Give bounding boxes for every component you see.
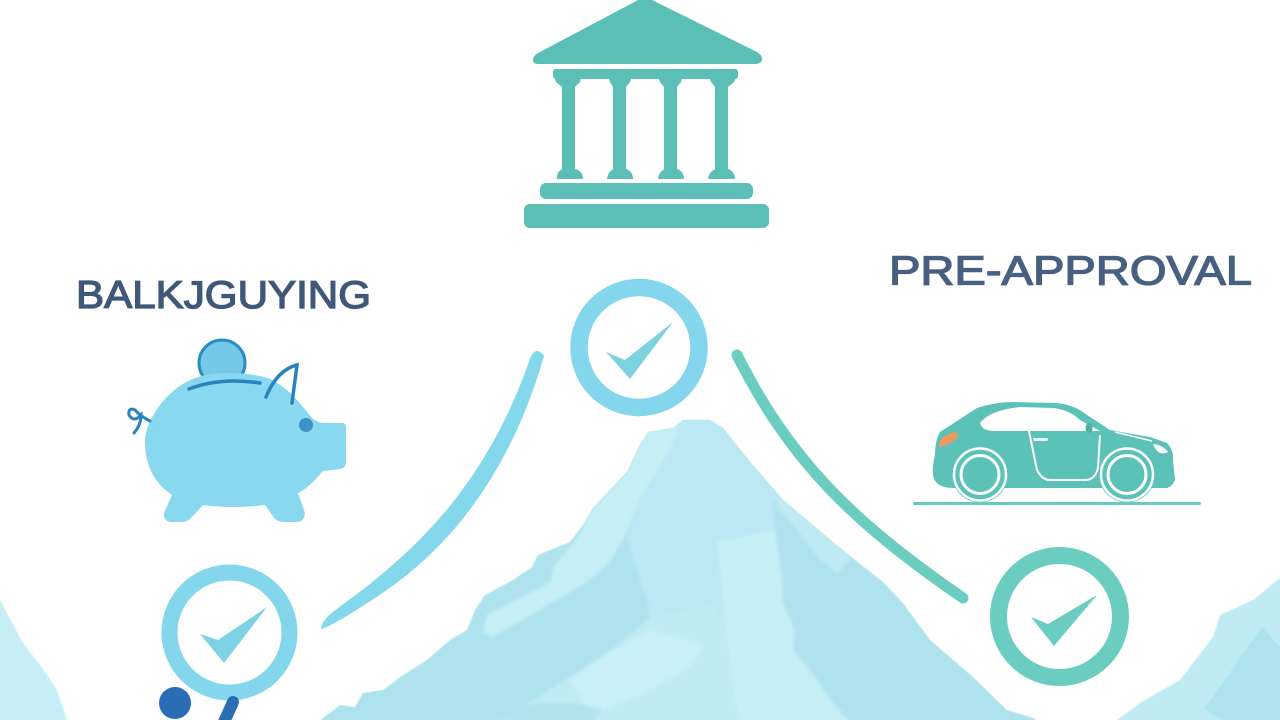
- bank building icon: [524, 0, 769, 228]
- check ring: left: [170, 572, 290, 692]
- rear wheel: [952, 446, 1008, 502]
- check ring: right: [998, 556, 1120, 678]
- car mirror: [1086, 423, 1092, 433]
- pig tail: [129, 409, 150, 433]
- pig slot: [189, 381, 260, 389]
- icon: bank upper step: [540, 183, 753, 199]
- right connecting arc: [737, 355, 963, 598]
- blue dot figure: [159, 687, 233, 720]
- mountain shaded layers: [483, 415, 853, 720]
- road line: [913, 502, 1201, 505]
- pig eye: [299, 418, 313, 432]
- right background mountain: [1113, 576, 1280, 720]
- car taillight: [939, 432, 958, 447]
- check ring: top: [579, 288, 699, 408]
- car body: [933, 402, 1175, 488]
- pig ear: [266, 365, 297, 403]
- icon: coin: [199, 340, 245, 386]
- icon: bank columns: [557, 84, 735, 179]
- central mountain: [318, 415, 1038, 720]
- front wheel: [1099, 446, 1155, 502]
- pig body: [145, 373, 346, 522]
- icon: car: [913, 402, 1201, 505]
- icon: bank roof: [533, 0, 762, 64]
- icon: bank entablature: [553, 69, 738, 79]
- left background mountain: [0, 598, 68, 720]
- icon: bank capitals: [553, 74, 738, 87]
- car headlight: [1153, 444, 1168, 453]
- mountain base: [318, 420, 1038, 720]
- car hood line: [1115, 432, 1152, 441]
- heading: balkjguying: BALKJGUYING: [76, 274, 371, 317]
- car window: [980, 407, 1100, 431]
- icon: bank lower step: [524, 204, 769, 228]
- car door handle: [1033, 438, 1048, 441]
- heading: pre-approval: PRE-APPROVAL: [889, 248, 1252, 294]
- icon: piggy bank: [129, 340, 346, 522]
- left connecting arc: [322, 352, 543, 628]
- car door outline: [1022, 408, 1100, 480]
